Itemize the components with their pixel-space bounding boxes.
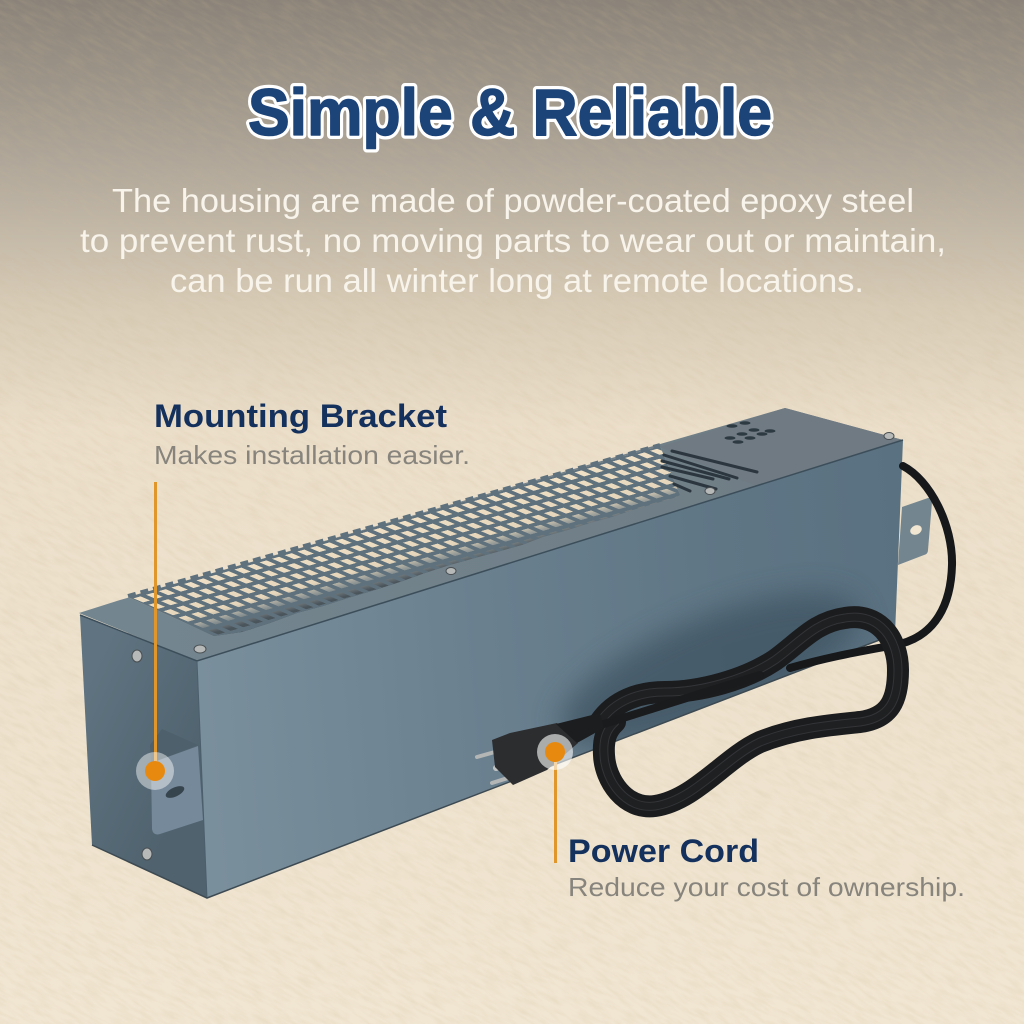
top face [79,408,903,661]
callout: power cord: Power Cord [568,833,759,869]
top edge shadow lines [80,440,903,661]
description text [80,182,946,299]
right mounting bracket [898,498,932,565]
description text: The housing are made of powder-coated epoxy steel [112,182,914,219]
long front face [197,440,903,898]
heater housing [79,408,903,898]
callout: power cord [537,734,965,902]
small vent holes [724,421,776,444]
screws [132,432,894,860]
left mounting bracket [150,729,203,834]
description text: to prevent rust, no moving parts to wear out or maintain, [80,222,946,259]
rear cord from heater [790,466,952,668]
long slots [662,451,757,491]
cord shadow on face [552,586,861,753]
callout: mounting bracket: Mounting Bracket [154,398,447,434]
callout: mounting bracket: Makes installation easier. [154,440,470,470]
callout: power cord: Reduce your cost of ownership. [568,872,965,902]
power plug [477,713,604,785]
ventilation grille [120,440,690,640]
grille back teeth [128,445,660,596]
callout: mounting bracket [136,398,470,790]
back of top, lighter plate [660,408,903,486]
title: Simple & Reliable [248,75,772,149]
end face [80,615,207,898]
title: Simple & Reliable [248,75,772,149]
coiled power cord [575,617,898,806]
description text: can be run all winter long at remote locations. [170,262,864,299]
